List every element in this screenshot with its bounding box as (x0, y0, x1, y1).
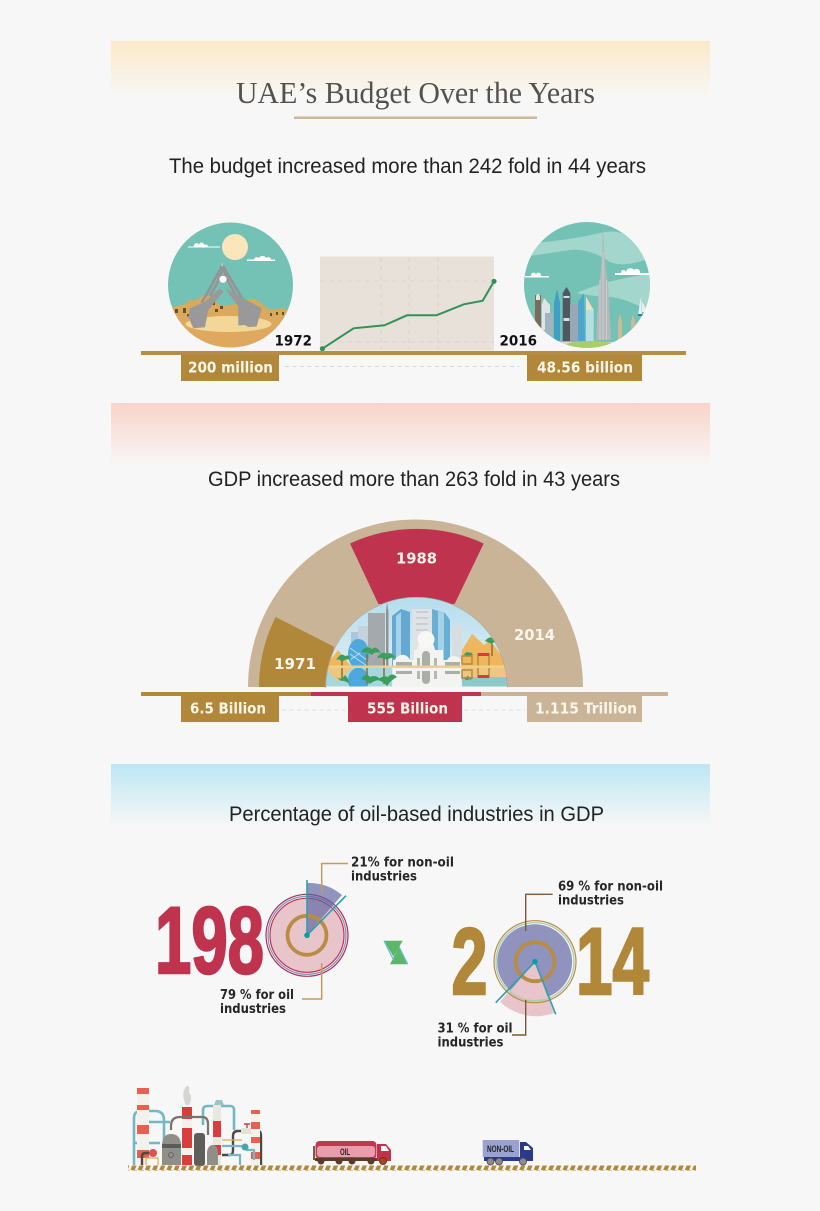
title: UAE’s Budget Over the Years (236, 75, 595, 110)
sector label 2014: 2014 (514, 626, 555, 644)
sector label 1971: 1971 (274, 655, 316, 673)
big year 198: 198 (155, 888, 264, 994)
title underline (294, 116, 537, 119)
sector label 1988: 1988 (396, 550, 437, 568)
dashed connector (285, 366, 519, 368)
leader line: 1980 oil (302, 963, 322, 999)
big digit 2: 2 (452, 909, 488, 1015)
GDP value 1971 (181, 696, 279, 722)
note: 69% non-oil: 69 % for non-oil (558, 880, 663, 895)
sector 1971 (259, 617, 334, 687)
illustration: oil truck (313, 1141, 391, 1164)
icon: hourglass (384, 941, 408, 964)
budget value 1972 (181, 355, 279, 381)
section band: oil (111, 764, 710, 826)
big digits 14: 14 (576, 909, 649, 1015)
year label 2016: 2016 (500, 334, 537, 350)
note: 21% non-oil: industries (351, 870, 417, 884)
illustration: UAE city dome (326, 597, 508, 688)
budget value 2016: 48.56 billion (537, 358, 633, 376)
leader line: 1980 non-oil (322, 864, 348, 893)
budget heading: The budget increased more than 242 fold in 44 years (169, 155, 646, 178)
illustration: Deira clocktower circle (168, 222, 294, 350)
budget value 1972: 200 million (188, 358, 273, 376)
note: 69% non-oil: industries (558, 894, 624, 909)
section band: budget (111, 41, 710, 97)
leader line: 2014 non-oil (526, 894, 553, 931)
sector 1988 (350, 529, 484, 604)
donut chart 2014 (494, 921, 576, 1016)
GDP value 1988: 555 Billion (367, 700, 448, 718)
section band: GDP (111, 403, 710, 465)
leader line: 2014 oil (512, 1000, 526, 1035)
illustration: Dubai skyline circle (524, 222, 651, 350)
budget baseline bar (141, 351, 686, 355)
GDP heading: GDP increased more than 263 fold in 43 years (208, 468, 620, 491)
illustration: oil refinery (134, 1086, 261, 1166)
infographic canvas (111, 41, 710, 1170)
note: 79% oil: industries (220, 1002, 286, 1017)
illustration: non-oil truck: NON-OIL (487, 1144, 514, 1154)
GDP value 1971: 6.5 Billion (190, 700, 266, 718)
line chart: budget growth (320, 256, 497, 351)
GDP value 2014: 1.115 Trillion (535, 700, 637, 718)
note: 21% non-oil: 21% for non-oil (351, 856, 454, 870)
note: 79% oil: 79 % for oil (220, 988, 294, 1003)
GDP value 1988 (348, 696, 462, 722)
oil heading: Percentage of oil-based industries in GDP (229, 803, 604, 826)
ground strip (128, 1166, 696, 1170)
GDP baseline bar (141, 692, 668, 696)
note: 31% oil: 31 % for oil (438, 1022, 512, 1037)
year label 1972: 1972 (274, 334, 312, 350)
dashed connectors (282, 709, 525, 711)
GDP semicircle chart (248, 520, 583, 687)
illustration: oil truck: OIL (340, 1147, 350, 1157)
note: 31% oil: industries (438, 1036, 504, 1051)
donut chart 1980 (266, 880, 348, 976)
GDP value 2014 (527, 696, 642, 722)
illustration: non-oil truck (483, 1140, 533, 1165)
budget value 2016 (527, 355, 642, 381)
